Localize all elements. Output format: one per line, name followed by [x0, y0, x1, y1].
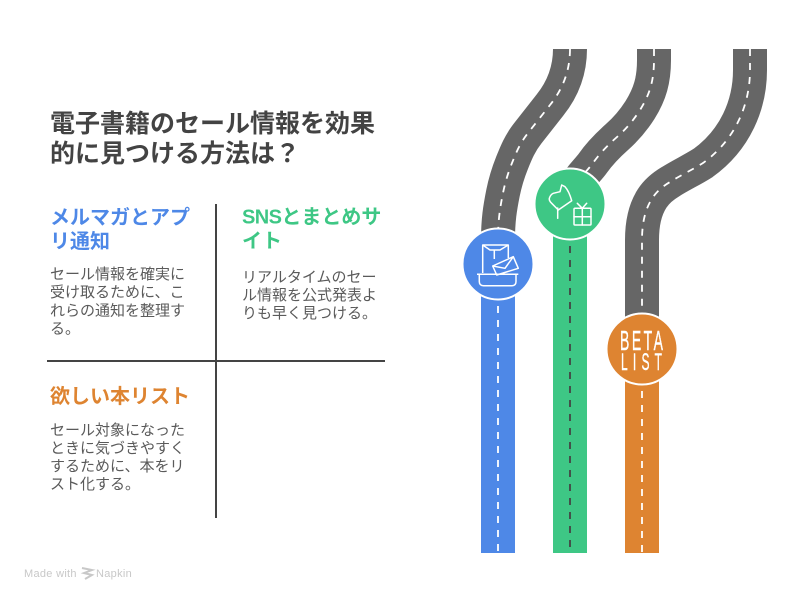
road 1: blue route: [481, 49, 570, 553]
icon: orange circle with BETA LIST: BETA: [620, 325, 663, 356]
heading: mail and app notifications: リ通知: [50, 230, 110, 253]
text block: mail and app notifications: セール情報を確実に: [50, 266, 185, 283]
icon: green circle with flag and gift: [534, 168, 606, 240]
text block: SNS and summary sites: ル情報を公式発表よ: [242, 287, 377, 304]
footer: Made with Napkin: [24, 568, 132, 580]
text block: wish list: ときに気づきやすく: [50, 440, 185, 457]
panel: mail and app notifications: [50, 206, 190, 338]
quadrant divider lines: [47, 204, 385, 518]
text block: wish list: するために、本をリ: [50, 458, 185, 475]
text block: wish list: スト化する。: [50, 476, 140, 493]
road 2: green route: [553, 49, 654, 553]
text block: mail and app notifications: 受け取るために、こ: [50, 284, 185, 301]
text block: SNS and summary sites: りも早く見つける。: [242, 305, 377, 322]
icon: orange circle with BETA LIST: LIST: [621, 350, 662, 376]
footer: Made with Napkin: Made with: [24, 568, 77, 580]
road 3: orange route: [625, 49, 750, 553]
icon: blue circle with mail tray: [462, 228, 534, 300]
footer: Made with Napkin: Napkin: [96, 568, 132, 580]
title: 電子書籍のセール情報を効果: [50, 110, 375, 138]
heading: SNS and summary sites: イト: [242, 230, 282, 252]
text block: mail and app notifications: れらの通知を整理す: [50, 302, 185, 320]
heading: mail and app notifications: [50, 206, 190, 253]
text block: mail and app notifications: [50, 266, 185, 338]
panel: SNS and summary sites: [242, 206, 381, 322]
icon: orange circle with BETA LIST: [606, 314, 678, 384]
panel: wish list: [50, 385, 190, 493]
heading: mail and app notifications: メルマガとアプ: [50, 206, 190, 229]
heading: SNS and summary sites: [242, 206, 381, 252]
title: 的に見つける方法は？: [50, 140, 300, 168]
heading: wish list: 欲しい本リスト: [50, 385, 190, 408]
text block: wish list: [50, 422, 185, 493]
text block: mail and app notifications: る。: [50, 320, 80, 338]
text block: SNS and summary sites: リアルタイムのセー: [242, 269, 377, 286]
icon: Napkin logo: [82, 568, 92, 579]
text block: wish list: セール対象になった: [50, 422, 185, 439]
title: [50, 110, 375, 168]
text block: SNS and summary sites: [242, 269, 377, 322]
heading: SNS and summary sites: SNSとまとめサ: [242, 206, 381, 228]
